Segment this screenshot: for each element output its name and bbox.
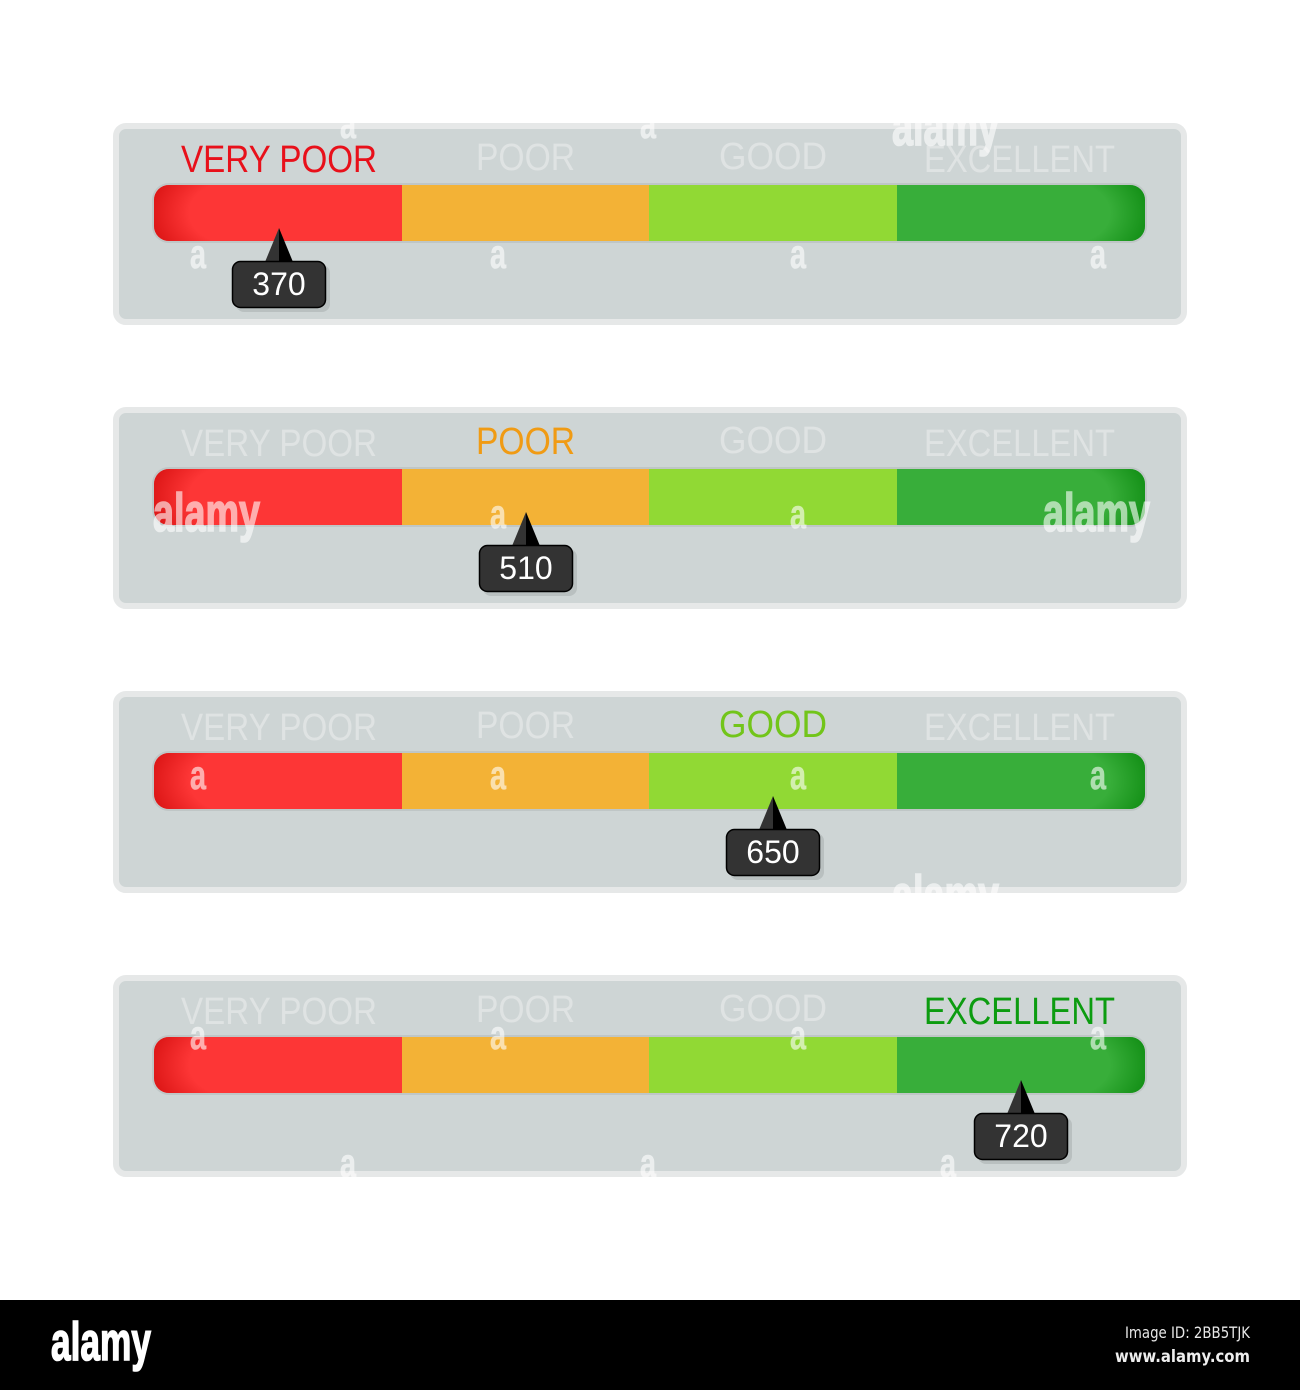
category labels: GOOD: [719, 704, 827, 746]
score bar: [152, 1035, 1147, 1095]
watermarks: [153, 97, 1150, 1186]
watermarks: alamy: [153, 483, 260, 543]
category labels: GOOD: [719, 136, 827, 178]
category labels: POOR: [476, 989, 575, 1031]
category labels: GOOD: [719, 988, 827, 1030]
panel background: [116, 410, 1184, 606]
watermarks: alamy: [892, 97, 999, 157]
panel background: [116, 978, 1184, 1174]
category labels: POOR: [476, 137, 575, 179]
footer logo: alamy: [51, 1312, 151, 1372]
pointer: 720: 720: [994, 1118, 1048, 1154]
panel: very poor meter: [116, 126, 1184, 322]
watermarks: a: [190, 231, 207, 277]
category labels: EXCELLENT: [924, 139, 1115, 181]
watermarks: a: [490, 752, 507, 798]
pointer: 370: 370: [252, 266, 306, 302]
panel: excellent meter: [116, 978, 1184, 1174]
watermarks: a: [190, 1012, 207, 1058]
category labels: [181, 988, 1115, 1033]
category labels: [181, 420, 1115, 465]
watermarks: a: [490, 491, 507, 537]
score bar: [152, 467, 1147, 527]
category labels: VERY POOR: [181, 991, 377, 1033]
category labels: [181, 704, 1115, 749]
category labels: POOR: [476, 421, 575, 463]
panel background: [116, 694, 1184, 890]
category labels: [181, 136, 1115, 181]
category labels: VERY POOR: [181, 139, 377, 181]
watermarks: a: [340, 1140, 357, 1186]
score bar: [152, 183, 1147, 243]
score bar: [152, 751, 1147, 811]
panel: poor meter: [116, 410, 1184, 606]
watermarks: a: [940, 1140, 957, 1186]
pointer: 720: [974, 1080, 1072, 1164]
watermarks: a: [790, 231, 807, 277]
watermarks: a: [1090, 1012, 1107, 1058]
pointer: 510: 510: [499, 550, 553, 586]
watermarks: a: [790, 1012, 807, 1058]
watermarks: a: [340, 101, 357, 147]
watermarks: a: [1090, 752, 1107, 798]
watermarks: a: [490, 231, 507, 277]
category labels: GOOD: [719, 420, 827, 462]
watermarks: a: [640, 1140, 657, 1186]
category labels: EXCELLENT: [924, 423, 1115, 465]
category labels: POOR: [476, 705, 575, 747]
pointer: 510: [480, 512, 577, 596]
image id: Image ID: 2BB5TJK: [1125, 1323, 1250, 1342]
category labels: VERY POOR: [181, 707, 377, 749]
pointer: 650: [726, 796, 824, 880]
category labels: VERY POOR: [181, 423, 377, 465]
watermarks: a: [640, 101, 657, 147]
watermarks: a: [490, 1012, 507, 1058]
watermarks: a: [190, 752, 207, 798]
white margin below panel 3: [113, 893, 1187, 933]
panel: good meter: [116, 694, 1184, 890]
watermarks: alamy: [892, 865, 999, 925]
category labels: EXCELLENT: [924, 707, 1115, 749]
panel background: [116, 126, 1184, 322]
watermarks: alamy: [1043, 483, 1150, 543]
footer bar: [0, 1300, 1300, 1390]
pointer: 370: [232, 228, 330, 312]
watermarks: a: [1090, 231, 1107, 277]
watermarks: a: [790, 752, 807, 798]
website: www.alamy.com: [1115, 1347, 1250, 1367]
category labels: EXCELLENT: [924, 991, 1115, 1033]
pointer: 650: 650: [746, 834, 800, 870]
watermarks: a: [790, 491, 807, 537]
